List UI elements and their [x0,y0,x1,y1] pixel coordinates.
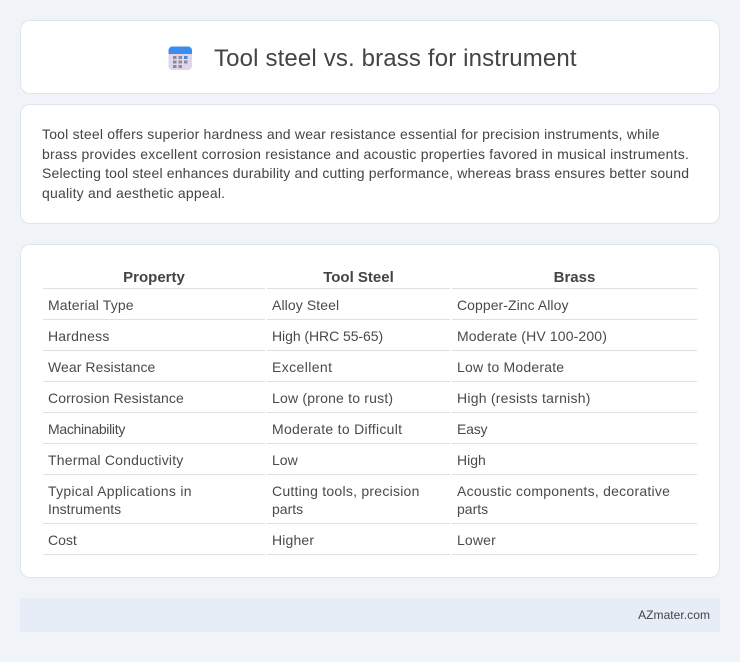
panel: comparison table card [20,244,720,578]
title: Tool steel vs. brass for instrument [214,45,577,72]
comparison table: Copper-Zinc Alloy [457,297,569,313]
comparison table: Material Type [48,297,134,313]
comparison table: Wear Resistance [48,359,155,375]
summary text: Tool steel offers superior hardness and wear resistance essential for precision instruments, while [42,126,660,142]
summary text [42,126,689,201]
comparison table: Higher [272,532,314,548]
comparison table: Corrosion Resistance [48,390,184,406]
panel: summary card [20,104,720,224]
summary text: brass provides excellent corrosion resistance and acoustic properties favored in musical instruments. [42,146,689,162]
header: Tool Steel: Tool Steel [323,269,394,286]
summary text: Selecting tool steel enhances durability and cutting performance, whereas brass ensures better sound [42,165,689,181]
comparison table: Instruments [48,501,121,517]
comparison table: High (resists tarnish) [457,390,591,406]
header: Property: Property [123,269,185,286]
comparison table: Acoustic components, decorative [457,483,670,499]
footer bar [20,598,720,632]
summary text: quality and aesthetic appeal. [42,184,225,200]
comparison table: Machinability [48,421,125,437]
comparison table: Low [272,452,298,468]
comparison table: Easy [457,421,487,437]
comparison table: Moderate (HV 100-200) [457,328,607,344]
comparison table: High (HRC 55-65) [272,328,383,344]
comparison table: parts [457,501,488,517]
icon: calendar [168,46,192,70]
panel: title card [20,20,720,94]
comparison table: Alloy Steel [272,297,339,313]
comparison table: Low (prone to rust) [272,390,393,406]
comparison table: Cost [48,532,77,548]
comparison table: Excellent [272,359,332,375]
comparison table: Lower [457,532,496,548]
comparison table: Hardness [48,328,110,344]
comparison table: Cutting tools, precision [272,483,420,499]
comparison table: Moderate to Difficult [272,421,402,437]
header: Brass: Brass [554,269,595,286]
footer credit: AZmater.com [638,608,710,622]
comparison table: Low to Moderate [457,359,564,375]
comparison table: High [457,452,486,468]
comparison table: Thermal Conductivity [48,452,184,468]
comparison table: parts [272,501,303,517]
comparison table: Typical Applications in [48,483,192,499]
